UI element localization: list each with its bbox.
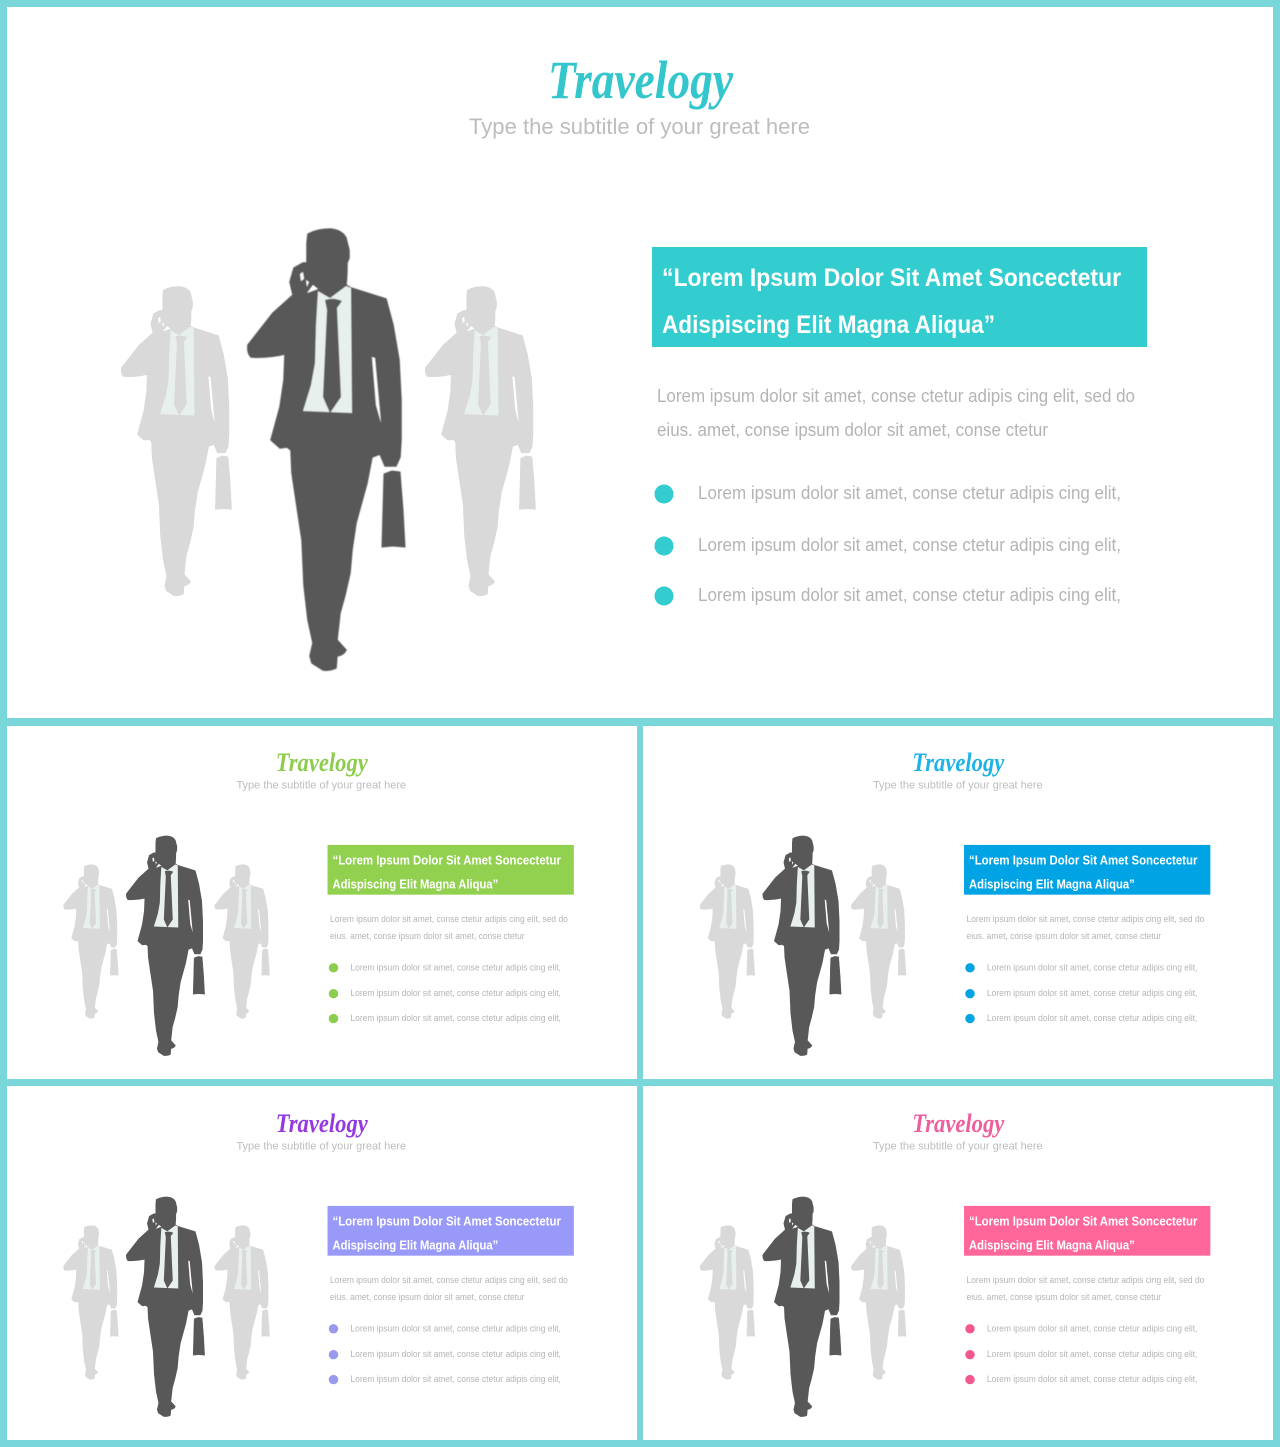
bullet list: Lorem ipsum dolor sit amet, conse ctetur adipis cing elit, bbox=[987, 962, 1197, 972]
quote box bbox=[328, 1206, 574, 1256]
pink slide content bbox=[700, 1108, 1210, 1417]
quote box: Adispiscing Elit Magna Aliqua” bbox=[662, 311, 995, 339]
figure: left grey businessman bbox=[700, 1226, 755, 1379]
quote box: Adispiscing Elit Magna Aliqua” bbox=[969, 877, 1135, 891]
panel: pink slide bbox=[643, 1086, 1273, 1440]
body paragraph bbox=[657, 386, 1135, 440]
body paragraph: Lorem ipsum dolor sit amet, conse ctetur adipis cing elit, sed do bbox=[330, 914, 568, 924]
title: Travelogy bbox=[912, 1108, 1004, 1138]
subtitle: Type the subtitle of your great here bbox=[873, 1141, 1043, 1153]
bullet list: Lorem ipsum dolor sit amet, conse ctetur adipis cing elit, bbox=[987, 1323, 1197, 1333]
quote box: Adispiscing Elit Magna Aliqua” bbox=[333, 877, 498, 891]
quote box: Adispiscing Elit Magna Aliqua” bbox=[969, 1238, 1135, 1252]
figure: left grey businessman bbox=[64, 865, 118, 1018]
blue slide content bbox=[700, 747, 1210, 1056]
quote box bbox=[328, 845, 574, 895]
title: Travelogy bbox=[548, 50, 734, 110]
subtitle: Type the subtitle of your great here bbox=[469, 114, 810, 139]
body paragraph: eius. amet, conse ipsum dolor sit amet, conse ctetur bbox=[657, 420, 1048, 440]
bullet list: Lorem ipsum dolor sit amet, conse ctetur adipis cing elit, bbox=[987, 1349, 1197, 1359]
body paragraph bbox=[330, 914, 568, 941]
figure: right grey businessman bbox=[425, 287, 536, 596]
panel: main teal slide bbox=[7, 7, 1273, 718]
body paragraph: eius. amet, conse ipsum dolor sit amet, conse ctetur bbox=[330, 1292, 525, 1302]
title: Travelogy bbox=[276, 1108, 368, 1138]
title: Travelogy bbox=[912, 747, 1004, 777]
body paragraph bbox=[967, 914, 1204, 941]
figure: central dark businessman bbox=[763, 836, 841, 1056]
quote box: Adispiscing Elit Magna Aliqua” bbox=[333, 1238, 498, 1252]
bullet list: Lorem ipsum dolor sit amet, conse ctetur adipis cing elit, bbox=[350, 1013, 561, 1023]
figure: left grey businessman bbox=[700, 865, 755, 1018]
body paragraph bbox=[967, 1275, 1204, 1302]
body paragraph: eius. amet, conse ipsum dolor sit amet, conse ctetur bbox=[967, 931, 1161, 941]
bullet list: Lorem ipsum dolor sit amet, conse ctetur adipis cing elit, bbox=[350, 988, 561, 998]
bullet list: Lorem ipsum dolor sit amet, conse ctetur adipis cing elit, bbox=[698, 483, 1121, 503]
figure: central dark businessman bbox=[126, 836, 205, 1056]
green slide content bbox=[64, 747, 574, 1056]
quote box: “Lorem Ipsum Dolor Sit Amet Soncectetur bbox=[969, 1214, 1198, 1228]
figure: central dark businessman bbox=[126, 1197, 205, 1417]
quote box: “Lorem Ipsum Dolor Sit Amet Soncectetur bbox=[969, 853, 1198, 867]
bullet list: Lorem ipsum dolor sit amet, conse ctetur adipis cing elit, bbox=[987, 1013, 1197, 1023]
subtitle: Type the subtitle of your great here bbox=[873, 780, 1043, 792]
quote box: “Lorem Ipsum Dolor Sit Amet Soncectetur bbox=[662, 264, 1121, 292]
bullet list bbox=[654, 483, 1121, 606]
body paragraph: Lorem ipsum dolor sit amet, conse ctetur adipis cing elit, sed do bbox=[330, 1275, 568, 1285]
figure: central dark businessman bbox=[763, 1197, 841, 1417]
panel: green slide bbox=[7, 726, 637, 1079]
title: Travelogy bbox=[276, 747, 368, 777]
quote box: “Lorem Ipsum Dolor Sit Amet Soncectetur bbox=[333, 1214, 561, 1228]
bullet list: Lorem ipsum dolor sit amet, conse ctetur adipis cing elit, bbox=[698, 585, 1121, 605]
bullet list: Lorem ipsum dolor sit amet, conse ctetur adipis cing elit, bbox=[350, 1349, 561, 1359]
body paragraph: Lorem ipsum dolor sit amet, conse ctetur adipis cing elit, sed do bbox=[967, 1275, 1204, 1285]
figure: right grey businessman bbox=[851, 865, 906, 1018]
purple slide content bbox=[64, 1108, 574, 1417]
panel: blue slide bbox=[643, 726, 1273, 1079]
body paragraph bbox=[330, 1275, 568, 1302]
bullet list bbox=[329, 962, 561, 1023]
quote box bbox=[964, 1206, 1210, 1256]
bullet list bbox=[329, 1323, 561, 1384]
figure: central dark businessman bbox=[248, 229, 405, 670]
bullet list bbox=[965, 962, 1197, 1023]
figure: right grey businessman bbox=[215, 865, 270, 1018]
body paragraph: eius. amet, conse ipsum dolor sit amet, conse ctetur bbox=[330, 931, 525, 941]
body paragraph: eius. amet, conse ipsum dolor sit amet, conse ctetur bbox=[967, 1292, 1161, 1302]
figure: left grey businessman bbox=[64, 1226, 118, 1379]
panel: purple slide bbox=[7, 1086, 637, 1440]
body paragraph: Lorem ipsum dolor sit amet, conse ctetur adipis cing elit, sed do bbox=[967, 914, 1204, 924]
body paragraph: Lorem ipsum dolor sit amet, conse ctetur adipis cing elit, sed do bbox=[657, 386, 1135, 406]
bullet list: Lorem ipsum dolor sit amet, conse ctetur adipis cing elit, bbox=[350, 1323, 561, 1333]
quote box bbox=[652, 247, 1147, 347]
figure: right grey businessman bbox=[215, 1226, 270, 1379]
bullet list: Lorem ipsum dolor sit amet, conse ctetur adipis cing elit, bbox=[350, 962, 561, 972]
subtitle: Type the subtitle of your great here bbox=[236, 1141, 406, 1153]
bullet list: Lorem ipsum dolor sit amet, conse ctetur adipis cing elit, bbox=[698, 535, 1121, 555]
figure: right grey businessman bbox=[851, 1226, 906, 1379]
bullet list: Lorem ipsum dolor sit amet, conse ctetur adipis cing elit, bbox=[987, 1374, 1197, 1384]
figure: left grey businessman bbox=[121, 287, 232, 596]
bullet list: Lorem ipsum dolor sit amet, conse ctetur adipis cing elit, bbox=[350, 1374, 561, 1384]
quote box bbox=[964, 845, 1210, 895]
bullet list bbox=[965, 1323, 1197, 1384]
bullet list: Lorem ipsum dolor sit amet, conse ctetur adipis cing elit, bbox=[987, 988, 1197, 998]
subtitle: Type the subtitle of your great here bbox=[236, 780, 406, 792]
quote box: “Lorem Ipsum Dolor Sit Amet Soncectetur bbox=[333, 853, 561, 867]
